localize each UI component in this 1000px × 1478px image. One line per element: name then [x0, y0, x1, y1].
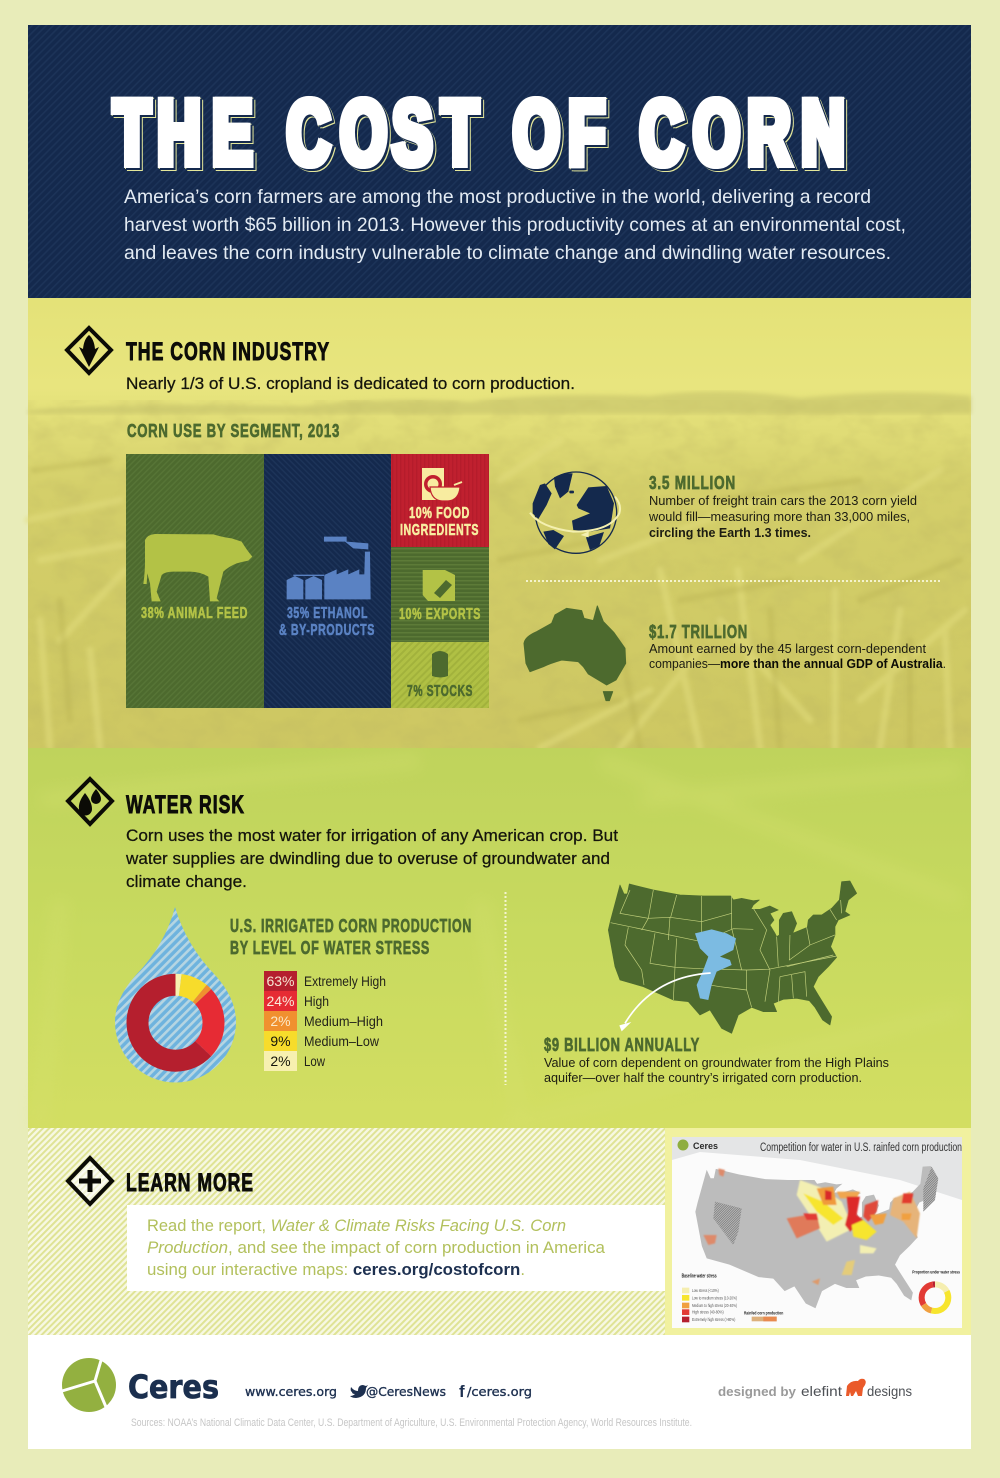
segment: food ingredients: INGREDIENTS [400, 522, 479, 539]
credit: elefint designs [718, 1379, 912, 1399]
donut: proportion [922, 1284, 948, 1311]
title: THE COST OF CORN [113, 82, 844, 184]
chart heading: water stress: BY LEVEL OF WATER STRESS [230, 938, 430, 958]
panel: the corn industry [28, 298, 971, 748]
stat: 3.5 million [648, 473, 917, 540]
segment: exports: 10% EXPORTS [399, 606, 481, 623]
icon: elephant [846, 1379, 866, 1396]
stat: 3.5 million: Number of freight train cars the 2013 corn yield [649, 493, 917, 508]
thumbnail: rainfed corn map [665, 1128, 971, 1335]
credit: elefint designs: elefint [801, 1383, 842, 1399]
learn more text box: using our interactive maps: ceres.org/costofcorn. [147, 1261, 525, 1279]
chart heading: water stress [230, 916, 472, 958]
legend: baseline stress: Low to medium stress (10-20%) [692, 1295, 737, 1300]
segment: exports [391, 547, 489, 642]
segment: ethanol: & BY-PRODUCTS [279, 622, 375, 639]
icon: cow [143, 534, 252, 601]
legend: Medium–Low [304, 1034, 379, 1049]
heading: learn more: LEARN MORE [126, 1169, 254, 1197]
panel: header [28, 25, 971, 298]
legend: baseline stress: Baseline water stress [682, 1274, 717, 1280]
chart heading: CORN USE BY SEGMENT, 2013 [127, 421, 340, 441]
learn more text box [127, 1205, 665, 1291]
intro text: and leaves the corn industry vulnerable to climate change and dwindling water resources. [124, 242, 891, 264]
stat: 1.7 trillion [649, 622, 946, 671]
legend: production ramp [744, 1310, 783, 1321]
sources: Sources: NOAA’s National Climatic Data Center, U.S. Department of Agriculture, U.S. Environmental Protection Agency, World Resources Institute. [131, 1417, 692, 1429]
stat: 3.5 million: would fill—measuring more than 33,000 miles, [648, 509, 910, 524]
stat: 9 billion: Value of corn dependent on groundwater from the High Plains [544, 1055, 889, 1070]
water text: Corn uses the most water for irrigation of any American crop. But [126, 827, 618, 845]
logo: mini ceres: Ceres [693, 1141, 718, 1151]
contact links: @CeresNews [366, 1384, 446, 1399]
heading: the corn industry: THE CORN INDUSTRY [126, 338, 330, 366]
icon: bowl [422, 468, 462, 501]
legend: baseline stress: Medium to high stress (20-40%) [692, 1303, 737, 1308]
legend: production ramp: Rainfed corn production [744, 1310, 783, 1315]
legend: 2% [270, 1053, 291, 1069]
logo: ceres [62, 1357, 219, 1412]
legend: Extremely High [304, 974, 386, 989]
water stress patches [682, 1167, 960, 1322]
segment: ethanol [264, 454, 391, 708]
stat: 9 billion: $9 BILLION ANNUALLY [544, 1035, 700, 1055]
contact links: /ceres.org [467, 1384, 532, 1399]
subhead: Nearly 1/3 of U.S. cropland is dedicated to corn production. [126, 375, 575, 393]
icon: bird [350, 1385, 368, 1398]
legend: 2% [270, 1013, 291, 1029]
stat: 9 billion: aquifer—over half the country’s irrigated corn production. [544, 1070, 862, 1085]
icon: globe [530, 472, 620, 553]
stat: 1.7 trillion: Amount earned by the 45 largest corn-dependent [649, 641, 926, 656]
legend: Low [304, 1054, 325, 1069]
segment: stocks: 7% STOCKS [407, 683, 473, 700]
icon: australia [524, 606, 626, 701]
logo: mini ceres [678, 1140, 718, 1151]
learn more text box: Read the report, Water & Climate Risks Facing U.S. Corn [147, 1217, 566, 1235]
credit: elefint designs: designs [867, 1383, 912, 1399]
icon: water diamond [68, 779, 112, 824]
water text: water supplies are dwindling due to overuse of groundwater and [125, 850, 610, 868]
legend [264, 971, 386, 1071]
contact links: f [459, 1382, 465, 1401]
water text: climate change. [126, 873, 247, 891]
segment: food ingredients: 10% FOOD [409, 505, 470, 522]
panel: learn more [28, 1128, 971, 1335]
contact links: www.ceres.org [245, 1384, 337, 1399]
legend: baseline stress: Low stress (<10%) [692, 1288, 719, 1293]
segment: stocks [391, 642, 489, 708]
icon: box [423, 570, 455, 601]
water stress patches: Proportion under water stress [912, 1269, 960, 1274]
region: aquifer [695, 929, 736, 1000]
icon: silo [432, 651, 448, 678]
icon: corn diamond [67, 328, 111, 373]
heading: water risk: WATER RISK [126, 791, 245, 819]
learn more text box: Production, and see the impact of corn production in America [147, 1239, 606, 1257]
legend: 9% [270, 1033, 291, 1049]
legend: baseline stress: High stress (40-80%) [692, 1310, 724, 1315]
legend: 24% [266, 993, 295, 1009]
contact links [245, 1382, 532, 1401]
credit: elefint designs: designed by [718, 1384, 797, 1399]
legend: baseline stress [682, 1274, 737, 1322]
water text [125, 827, 618, 891]
segment: animal feed: 38% ANIMAL FEED [141, 605, 248, 622]
stat: 3.5 million: circling the Earth 1.3 times. [649, 525, 811, 540]
stat: 1.7 trillion: companies—more than the annual GDP of Australia. [649, 656, 946, 671]
legend: 63% [266, 973, 295, 989]
segment: food ingredients [391, 454, 489, 547]
chart: water drop donut [115, 907, 236, 1082]
panel: water risk [28, 748, 971, 1128]
map: high plains aquifer [608, 881, 857, 1033]
panel: footer [28, 1335, 971, 1449]
chart heading: water stress: U.S. IRRIGATED CORN PRODUCTION [230, 916, 472, 936]
logo: ceres: Ceres [128, 1368, 219, 1406]
arrow: aquifer to value [619, 973, 711, 1031]
us map grey [695, 1166, 937, 1308]
intro text [124, 186, 906, 264]
icon: plus diamond [68, 1158, 112, 1204]
stat: 9 billion [544, 1035, 889, 1085]
chart: corn use treemap [126, 454, 489, 708]
segment: ethanol: 35% ETHANOL [287, 605, 368, 622]
legend: baseline stress: Extremely high stress (>80%) [692, 1317, 736, 1322]
legend: Medium–High [304, 1014, 383, 1029]
stat: 3.5 million: 3.5 MILLION [649, 473, 736, 493]
legend: High [304, 994, 329, 1009]
intro text: America’s corn farmers are among the most productive in the world, delivering a record [124, 186, 871, 208]
stat: 1.7 trillion: $1.7 TRILLION [649, 622, 748, 642]
intro text: harvest worth $65 billion in 2013. However this productivity comes at an environmental cost, [124, 214, 906, 236]
segment: animal feed [126, 454, 264, 708]
icon: factory [287, 537, 371, 599]
